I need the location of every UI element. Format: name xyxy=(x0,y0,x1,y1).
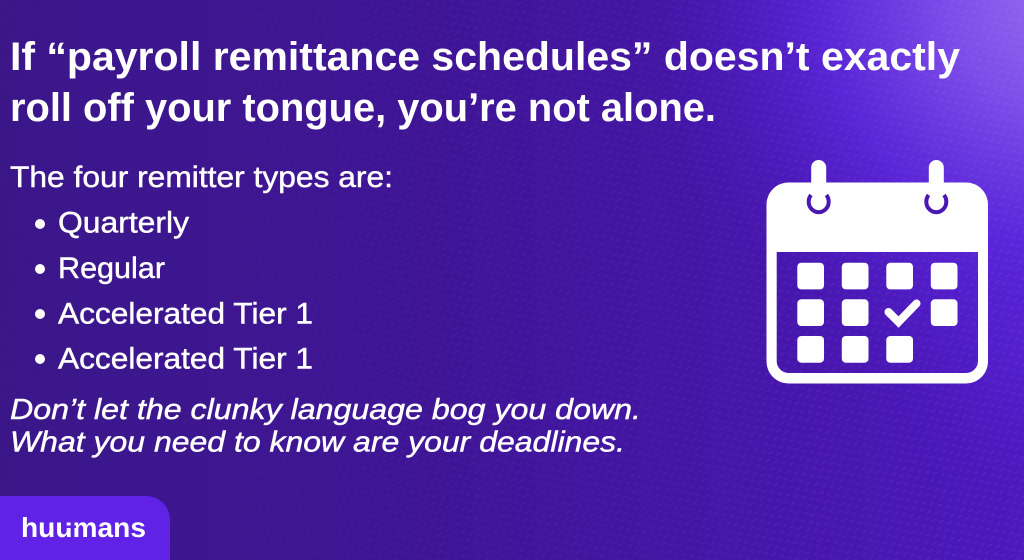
title: roll off your tongue, you’re not alone. xyxy=(10,86,716,130)
binder ring: left xyxy=(809,160,829,212)
list intro: The four remitter types are: xyxy=(10,161,393,194)
background xyxy=(428,0,1024,560)
title: If “payroll remittance schedules” doesn’t exactly xyxy=(10,35,961,79)
item: Regular: Regular xyxy=(58,252,165,285)
italic note: Don’t let the clunky language bog you down. xyxy=(10,394,641,426)
logo wordmark: huumans xyxy=(21,512,146,543)
logo smile gap xyxy=(61,526,76,528)
binder ring: right xyxy=(926,160,946,212)
icon: calendar xyxy=(766,160,988,384)
remitter type list xyxy=(35,206,313,376)
item: Accelerated Tier 1: Accelerated Tier 1 xyxy=(58,298,313,330)
logo tab xyxy=(0,496,170,560)
italic note xyxy=(10,394,641,458)
date squares xyxy=(797,263,958,363)
item: Accelerated Tier 1 (second): Accelerated Tier 1 xyxy=(58,342,313,376)
item: Quarterly: Quarterly xyxy=(58,206,189,240)
italic note: What you need to know are your deadlines. xyxy=(10,426,625,458)
title xyxy=(10,35,961,130)
check mark xyxy=(888,304,916,322)
